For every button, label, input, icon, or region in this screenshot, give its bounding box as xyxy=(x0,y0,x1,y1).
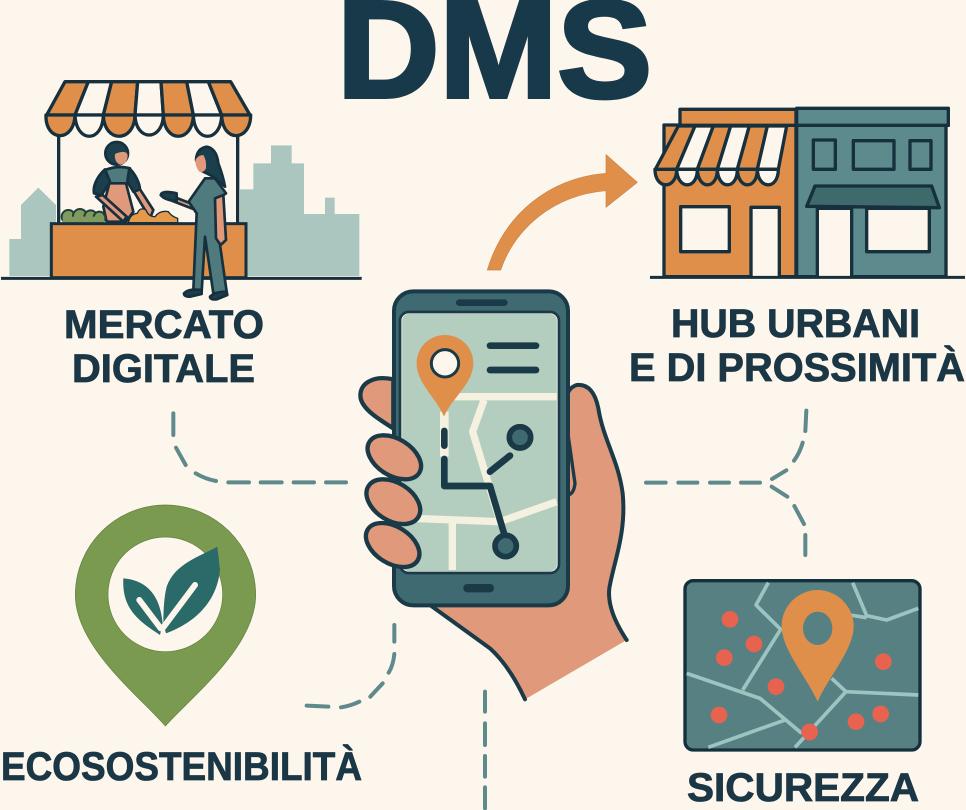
label: sicurezza: SICUREZZA xyxy=(687,766,919,810)
speaker xyxy=(456,299,508,306)
label: hub urbani e di prossimita xyxy=(629,302,965,390)
awning xyxy=(46,82,251,136)
vegetables xyxy=(62,209,105,223)
label: hub urbani e di prossimita: HUB URBANI xyxy=(671,302,920,346)
illustration: hand holding phone xyxy=(358,291,627,699)
fruit xyxy=(128,209,178,223)
arrow: market to hub xyxy=(487,155,637,270)
illustration: market stall xyxy=(1,82,362,299)
connector: market to phone xyxy=(173,413,346,482)
label: mercato digitale xyxy=(64,303,264,391)
route nodes xyxy=(495,535,516,557)
connector: ecology to phone xyxy=(307,625,485,808)
side button xyxy=(568,437,575,495)
customer xyxy=(161,147,227,299)
illustration: urban hub shops xyxy=(650,108,965,277)
skyline xyxy=(9,145,359,276)
label: hub urbani e di prossimita: E DI PROSSIMITÀ xyxy=(629,345,965,390)
label: mercato digitale: MERCATO xyxy=(64,303,264,347)
icon: safety map xyxy=(685,581,920,750)
label: mercato digitale: DIGITALE xyxy=(72,347,255,391)
stall posts xyxy=(59,133,238,223)
location pin xyxy=(417,335,473,417)
fingers xyxy=(358,378,429,576)
palm xyxy=(430,385,627,699)
phone body xyxy=(394,291,568,605)
leaves xyxy=(123,547,220,635)
teal shop xyxy=(797,108,948,277)
ground line xyxy=(1,274,362,283)
roads xyxy=(687,583,918,747)
striped awning xyxy=(655,126,787,185)
pin xyxy=(782,590,854,702)
home button xyxy=(463,584,494,592)
icon: ecology pin with leaves xyxy=(75,505,256,726)
connector: hub and safety to phone xyxy=(646,411,806,555)
orange shop xyxy=(664,109,796,277)
label: ecosostenibilita: ECOSOSTENIBILITÀ xyxy=(1,744,362,789)
vendor xyxy=(94,142,153,222)
screen map xyxy=(400,312,559,573)
counter xyxy=(51,224,246,278)
incident dots xyxy=(711,611,892,740)
route xyxy=(444,346,536,537)
ground line xyxy=(650,273,965,282)
